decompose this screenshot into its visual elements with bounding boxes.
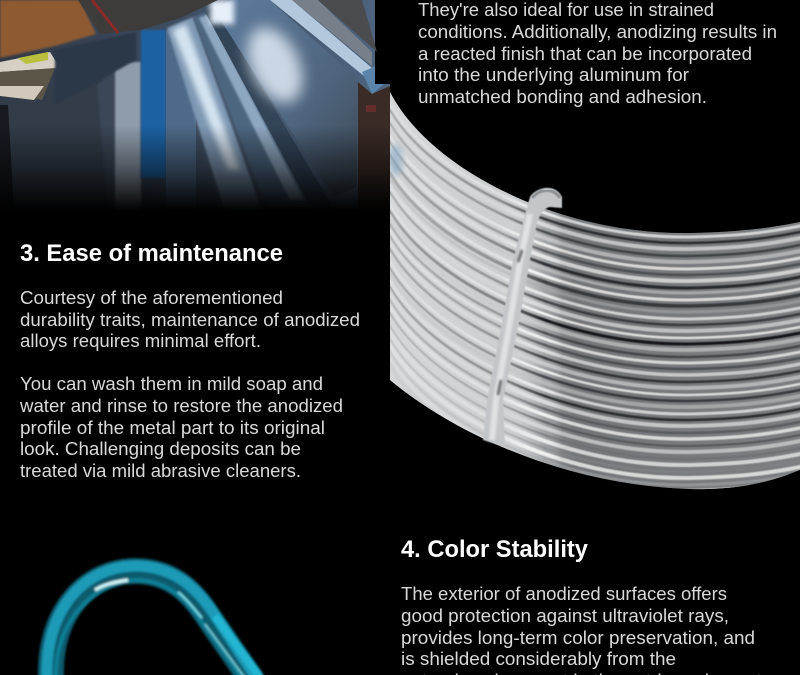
steel rail: [270, 0, 372, 76]
photo: worker handling metal sheet: [0, 0, 390, 211]
blue strip: [141, 30, 166, 178]
brushed plate: [213, 0, 358, 197]
text block: ease of maintenance: treated via mild abrasive cleaners.: [20, 461, 301, 481]
text block: point 2 conclusion: into the underlying aluminum for: [418, 65, 689, 85]
fade to black: [0, 125, 390, 211]
text block: point 2 conclusion: [418, 0, 777, 107]
photo: anodized cyan wire hook: [47, 485, 372, 675]
text block: ease of maintenance: profile of the metal part to its original: [20, 418, 325, 438]
text block: color stability: [401, 584, 771, 675]
text block: ease of maintenance: alloys requires minimal effort.: [20, 331, 261, 351]
text block: point 2 conclusion: a reacted finish that can be incorporated: [418, 44, 752, 64]
text block: ease of maintenance: You can wash them in mild soap and: [20, 374, 323, 394]
dark plate behind hook: [100, 485, 372, 675]
dark lower left panel: [74, 82, 102, 156]
text block: color stability: good protection against ultraviolet rays,: [401, 606, 729, 626]
diagonal rails: [167, 17, 262, 211]
text block: ease of maintenance: [19, 288, 360, 481]
pale column: [115, 62, 141, 211]
orange glove: [0, 0, 96, 58]
grey sleeve: [78, 0, 218, 34]
text block: color stability: The exterior of anodized surfaces offers: [401, 584, 727, 604]
text block: ease of maintenance: look. Challenging deposits can be: [20, 439, 301, 459]
wire coil binding strap: [483, 188, 562, 447]
text block: color stability: is shielded considerably from the: [401, 649, 676, 669]
brown column: [358, 82, 390, 211]
text block: point 2 conclusion: conditions. Additionally, anodizing results in: [418, 22, 777, 42]
text block: ease of maintenance: Courtesy of the aforementioned: [20, 288, 283, 308]
heading: 3. Ease of maintenance: 3. Ease of maintenance: [20, 240, 283, 267]
text block: ease of maintenance: water and rinse to restore the anodized: [19, 396, 343, 416]
heading: 4. Color Stability: 4. Color Stability: [401, 536, 589, 563]
text block: color stability: provides long-term color preservation, and: [401, 628, 755, 648]
photo: galvanised wire coil: [389, 90, 800, 500]
text block: ease of maintenance: durability traits, maintenance of anodized: [20, 310, 360, 330]
text block: point 2 conclusion: unmatched bonding and adhesion.: [418, 87, 707, 107]
text block: point 2 conclusion: They're also ideal for use in strained: [418, 0, 714, 20]
